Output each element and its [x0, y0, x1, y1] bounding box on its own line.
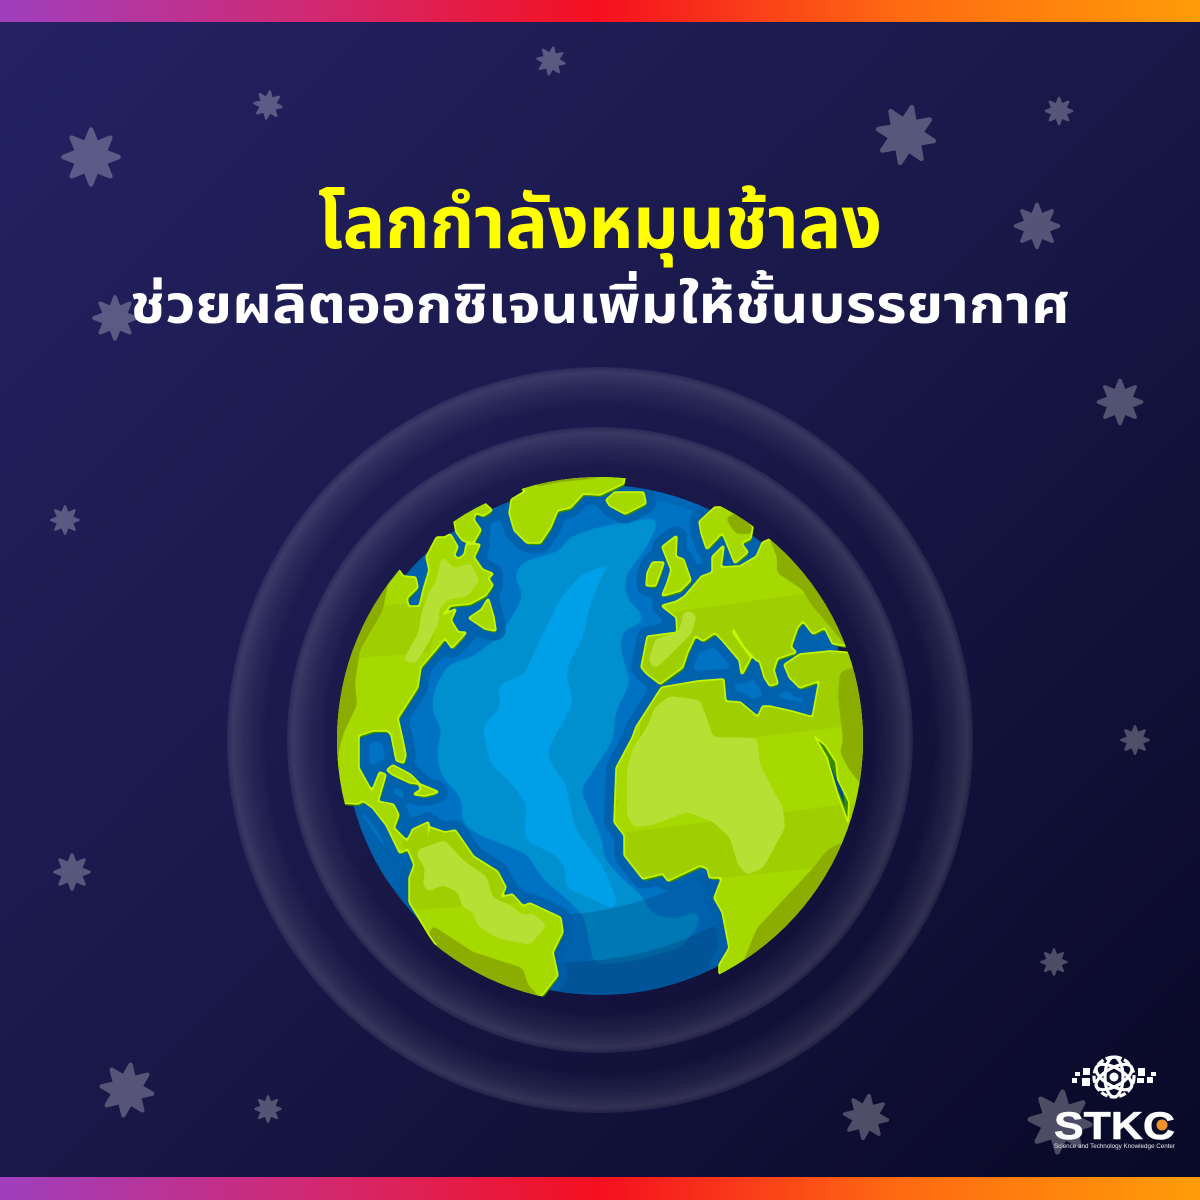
ocean shade band	[356, 814, 718, 995]
logo wordmark: STKC	[1054, 1105, 1175, 1148]
ocean	[354, 486, 839, 995]
red sea	[815, 737, 849, 822]
land base	[337, 477, 863, 996]
ocean deep shade band	[392, 886, 718, 995]
highlight africa	[627, 696, 785, 875]
land rim	[337, 477, 863, 996]
latitude bands	[624, 804, 855, 880]
ocean top shade	[414, 491, 701, 566]
title	[130, 181, 1070, 335]
land shadow	[337, 477, 863, 997]
ocean mid-depth layer	[435, 520, 697, 962]
logo: STKC	[1054, 1057, 1175, 1150]
land highlights	[405, 558, 785, 945]
limb shade south america	[429, 927, 538, 996]
limb shade africa	[744, 844, 842, 960]
limb shade eurasia	[770, 500, 890, 645]
continents	[337, 477, 863, 997]
top gradient bar	[0, 0, 1200, 22]
highlight north america	[405, 558, 478, 662]
atmosphere rings	[227, 367, 973, 1113]
land details	[337, 477, 863, 996]
limb shade west	[337, 585, 388, 758]
coastal shelf halo	[354, 486, 839, 992]
globe	[337, 477, 863, 997]
logo tagline: Science and Technology Knowledge Center	[1054, 1143, 1175, 1150]
highlight iberia	[650, 612, 695, 667]
limb shade scandinavia	[727, 514, 752, 534]
bottom gradient bar	[0, 1177, 1200, 1200]
limb shade greenland	[536, 477, 598, 486]
logo orange dot	[1156, 1120, 1168, 1130]
icon: atom	[1092, 1057, 1136, 1097]
limb shading	[337, 477, 863, 996]
title line 2: ช่วยผลิตออกซิเจนเพิ่มให้ชั้นบรรยากาศ	[130, 270, 1070, 335]
limb shade asia	[838, 668, 863, 783]
highlight south america	[417, 840, 547, 945]
title line 1: โลกกำลังหมุนช้าลง	[318, 181, 882, 268]
ocean shallow layer	[485, 555, 622, 908]
icon: data pixels	[1072, 1068, 1156, 1086]
